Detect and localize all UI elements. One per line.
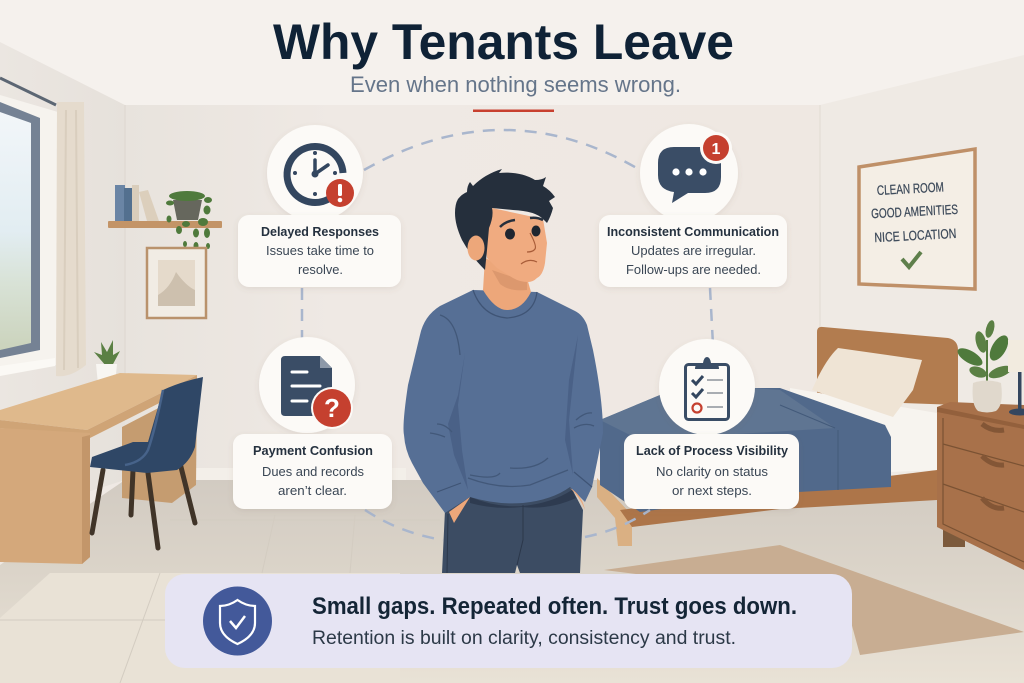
bed [597,327,958,546]
icon: chat bubble [658,132,732,203]
card: delayed responses [238,125,401,287]
framed picture [147,248,206,318]
card: inconsistent communication: Inconsistent Communication [607,224,779,239]
wall sign: NICE LOCATION [874,226,957,245]
nightstand [937,402,1024,570]
desk plant [94,340,120,386]
rug [604,545,1024,655]
card: lack of process visibility: Lack of Process Visibility [636,443,789,458]
card: inconsistent communication: Updates are irregular. [631,244,756,258]
card: lack of process visibility [624,339,799,509]
callout: takeaway banner: Retention is built on clarity, consistency and trust. [312,628,736,649]
card: delayed responses: Delayed Responses [261,224,379,239]
icon: shield [203,586,272,656]
card: lack of process visibility: or next steps. [672,484,752,498]
card: payment confusion: Dues and records [262,465,364,479]
card: delayed responses: resolve. [298,263,343,277]
card: lack of process visibility: No clarity on status [656,465,768,479]
wall sign: CLEAN ROOM [877,179,944,198]
icon: clock [287,147,354,207]
trousers [442,485,583,573]
card: delayed responses: Issues take time to [266,244,374,258]
nightstand plant [955,319,1013,412]
callout: takeaway banner [165,574,852,668]
face [485,208,547,282]
person [404,169,603,573]
neck [483,258,531,310]
icon: chat bubble: 1 [712,141,721,158]
title accent line [473,110,554,112]
window [0,78,86,376]
sweater [404,290,603,513]
card: inconsistent communication [599,124,787,287]
lamp [1008,340,1024,416]
desk [0,373,197,564]
icon: clipboard checklist [686,357,728,420]
card: payment confusion [233,337,392,509]
icon: document with question mark [281,356,353,429]
ear [468,236,484,260]
card: inconsistent communication: Follow-ups are needed. [626,263,761,277]
icon: document with question mark: ? [324,393,340,423]
title: Why Tenants Leave [273,14,734,70]
callout: takeaway banner: Small gaps. Repeated often. Trust goes down. [312,593,797,620]
hair [455,169,555,270]
chair [90,377,203,548]
eyes and brows [505,228,515,240]
subtitle: Even when nothing seems wrong. [350,72,681,97]
card: payment confusion: Payment Confusion [253,443,373,458]
hands [449,488,585,523]
wall sign [859,149,975,289]
dashed connector ring [302,130,713,540]
card: payment confusion: aren’t clear. [278,484,347,498]
wall sign: GOOD AMENITIES [871,202,958,221]
shelf with books and plant [108,185,222,250]
